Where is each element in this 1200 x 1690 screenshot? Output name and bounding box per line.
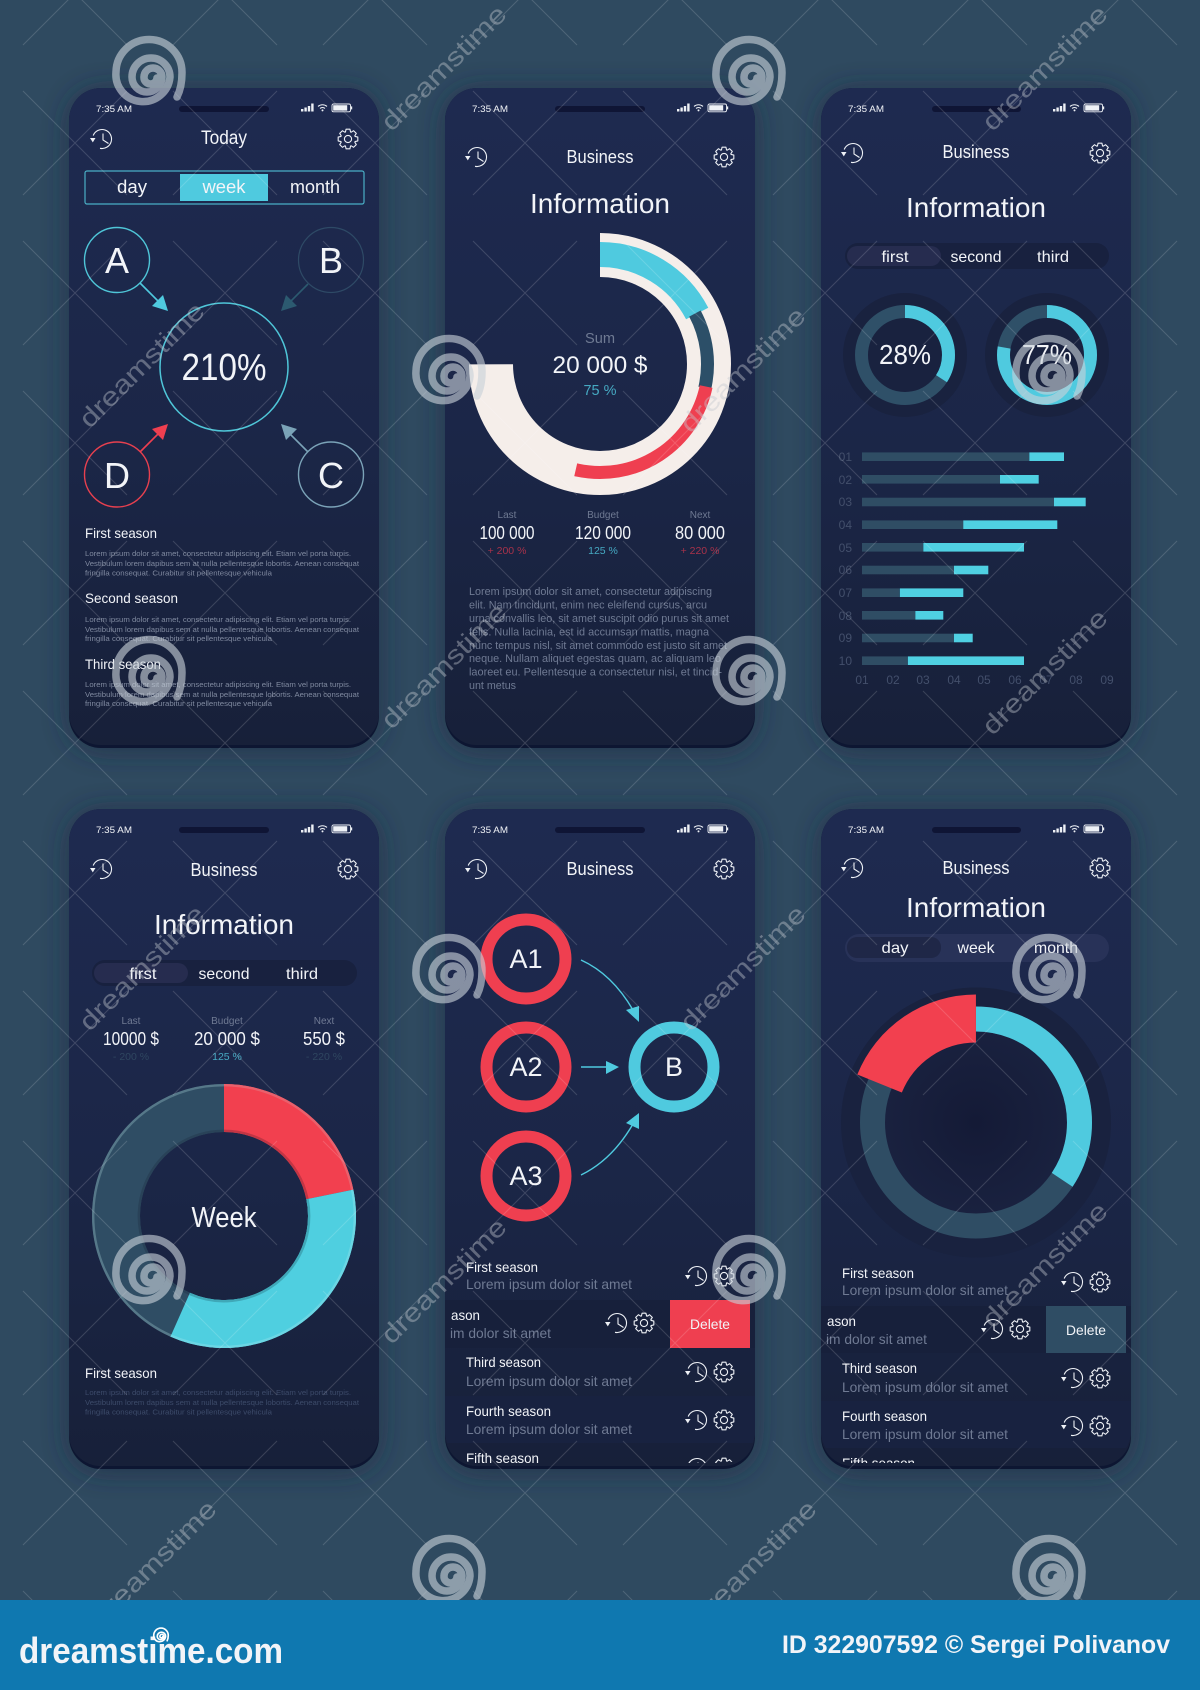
footer band bbox=[0, 1600, 1200, 1690]
list row: fourth season: Fourth season bbox=[466, 1403, 551, 1419]
title: information: Information bbox=[906, 892, 1046, 923]
delete button bbox=[1046, 1306, 1126, 1353]
list row: swiped second season: ason bbox=[451, 1307, 480, 1323]
watermark spirals bbox=[116, 40, 1082, 1601]
title: information: Information bbox=[154, 909, 294, 940]
node B bbox=[298, 228, 364, 292]
status bar: 7:35 AM bbox=[848, 825, 884, 836]
text block: first season: First season bbox=[85, 1365, 157, 1381]
status bar bbox=[96, 104, 352, 115]
gauge 77% bbox=[985, 293, 1109, 417]
tab control: third bbox=[1037, 249, 1069, 266]
watermark wordmarks: dreamstime bbox=[976, 1196, 1114, 1334]
list row: third season: Third season bbox=[842, 1360, 917, 1376]
stat: last: - 200 % bbox=[113, 1051, 149, 1063]
arrow D bbox=[140, 424, 168, 452]
text block: second season bbox=[85, 590, 360, 643]
paragraph: felis. Nulla lacinia, est id accumsan mattis, magna bbox=[469, 626, 710, 638]
paragraph: Lorem ipsum dolor sit amet, consectetur adipiscing bbox=[469, 586, 712, 598]
status bar bbox=[472, 104, 728, 115]
node A3: A3 bbox=[509, 1161, 543, 1191]
bar chart: 01 bbox=[839, 450, 852, 464]
paragraph: unt metus bbox=[469, 680, 516, 692]
text block: third season bbox=[85, 656, 360, 708]
bar chart: 04 bbox=[839, 518, 852, 532]
bar chart bbox=[839, 450, 1114, 687]
sum readout: Sum bbox=[585, 330, 615, 347]
icon: settings bbox=[1090, 858, 1110, 878]
list row: first season bbox=[842, 1265, 1110, 1298]
watermark wordmarks: dreamstime bbox=[85, 1494, 223, 1632]
paragraph: nunc tempus nisl, sit amet commodo est justo sit amet bbox=[469, 640, 727, 652]
list row: fifth season bbox=[467, 1453, 732, 1463]
text block: third season: Lorem ipsum dolor sit amet, consectetur adipiscing elit. Etiam vel porta turpis. bbox=[85, 680, 351, 689]
arrow A3 to B bbox=[581, 1113, 639, 1175]
node A: A bbox=[105, 240, 129, 281]
segmented control: week bbox=[201, 177, 247, 197]
heading: business: Business bbox=[190, 860, 258, 880]
bar chart: 07 bbox=[1039, 673, 1053, 687]
list row: swiped second season: im dolor sit amet bbox=[826, 1331, 927, 1347]
text block: first season: Lorem ipsum dolor sit amet, consectetur adipiscing elit. Etiam vel porta turpis. bbox=[85, 1388, 351, 1397]
text block: second season: Second season bbox=[85, 590, 178, 606]
arrow A1 to B bbox=[581, 960, 639, 1022]
stat: next: 550 $ bbox=[303, 1029, 345, 1049]
icon: history bbox=[841, 859, 863, 878]
centre circle 210%: 210% bbox=[182, 347, 266, 389]
stat: budget: Budget bbox=[587, 510, 619, 521]
list row: first season: First season bbox=[466, 1259, 538, 1275]
text block: first season: Vestibulum lorem dapibus sem at nulla pellentesque lobortis. Aenean consequat bbox=[85, 1398, 360, 1407]
stat: budget bbox=[194, 1016, 260, 1063]
tab control: second bbox=[198, 966, 250, 983]
paragraph: neque. Nullam aliquet egestas quam, ac aliquam leo bbox=[469, 653, 721, 665]
gauge 28% bbox=[843, 293, 967, 417]
sum readout bbox=[552, 330, 648, 399]
icon: settings bbox=[714, 859, 734, 879]
stat: budget: 20 000 $ bbox=[194, 1029, 260, 1049]
list row: first season: Lorem ipsum dolor sit amet bbox=[842, 1282, 1008, 1298]
donut label: Week bbox=[192, 1202, 257, 1234]
stat: next: - 220 % bbox=[306, 1051, 342, 1063]
title: information: Information bbox=[906, 192, 1046, 223]
centre circle 210% bbox=[160, 303, 288, 431]
segmented control: month bbox=[290, 177, 340, 197]
status bar bbox=[96, 824, 352, 836]
icon: settings bbox=[338, 129, 358, 149]
status bar: 7:35 AM bbox=[472, 104, 508, 115]
stat: last: + 200 % bbox=[488, 545, 526, 557]
radial chart bbox=[841, 987, 1111, 1258]
bar chart: 09 bbox=[839, 631, 852, 645]
watermark wordmarks: dreamstime bbox=[976, 603, 1114, 741]
list row: third season bbox=[466, 1354, 734, 1389]
title: information: Information bbox=[530, 188, 670, 219]
node B: B bbox=[665, 1052, 683, 1082]
bar chart: 08 bbox=[839, 609, 852, 623]
phone: week donut bbox=[51, 809, 397, 1469]
bar chart: 03 bbox=[839, 495, 852, 509]
tab control bbox=[845, 934, 1109, 962]
node A bbox=[84, 228, 150, 292]
segmented control: day bbox=[117, 177, 147, 197]
node D bbox=[84, 442, 150, 507]
watermark wordmarks: dreamstime bbox=[976, 0, 1114, 137]
stat: budget: 125 % bbox=[588, 545, 618, 557]
stat: next bbox=[675, 510, 725, 557]
watermark wordmarks: dreamstime bbox=[73, 899, 211, 1037]
delete button: Delete bbox=[1066, 1322, 1106, 1338]
list row: third season bbox=[842, 1360, 1110, 1395]
phone: radial progress and list bbox=[821, 809, 1131, 1471]
list row: third season: Lorem ipsum dolor sit amet bbox=[842, 1379, 1008, 1395]
node A2 bbox=[486, 1028, 566, 1106]
stat: last: 10000 $ bbox=[103, 1029, 159, 1049]
swipe list bbox=[821, 1265, 1131, 1471]
tab control: first bbox=[882, 249, 909, 266]
paragraph: urna convallis leo, sit amet suscipit odio purus sit amet bbox=[469, 613, 729, 625]
watermark wordmarks: dreamstime bbox=[674, 899, 812, 1037]
node D: D bbox=[104, 455, 130, 496]
bar chart: 07 bbox=[839, 586, 852, 600]
heading: business: Business bbox=[942, 858, 1010, 878]
stat: last: 100 000 bbox=[480, 523, 534, 543]
gauge 28%: 28% bbox=[879, 339, 931, 370]
node A1: A1 bbox=[509, 944, 543, 974]
paragraph bbox=[469, 586, 729, 692]
bar chart: 04 bbox=[947, 673, 961, 687]
text block: first season: First season bbox=[85, 525, 157, 541]
tab control bbox=[92, 960, 357, 986]
list row: third season: Third season bbox=[466, 1354, 541, 1370]
list row: swiped second season bbox=[826, 1318, 1030, 1344]
text block: second season: fringilla consequat. Curabitur sit pellentesque vehicula bbox=[85, 634, 273, 643]
arrow A2 to B bbox=[581, 1061, 619, 1074]
status bar bbox=[472, 824, 728, 836]
stat: next: + 220 % bbox=[681, 545, 719, 557]
list row: first season: First season bbox=[842, 1265, 914, 1281]
text block: first season bbox=[85, 525, 360, 578]
text block: second season: Vestibulum lorem dapibus sem at nulla pellentesque lobortis. Aenean consequat bbox=[85, 625, 360, 634]
paragraph: laoreet eu. Pellentesque a consectetur nisi, et tincid- bbox=[469, 667, 722, 679]
text block: third season: fringilla consequat. Curabitur sit pellentesque vehicula bbox=[85, 699, 273, 708]
arrow C bbox=[281, 424, 308, 452]
stat: last bbox=[480, 510, 534, 557]
text block: third season: Third season bbox=[85, 656, 161, 672]
phone: flow diagram and list bbox=[445, 809, 755, 1478]
icon: settings bbox=[1090, 143, 1110, 163]
heading: business: Business bbox=[566, 859, 634, 879]
tab control: day bbox=[882, 940, 908, 957]
text block: second season: Lorem ipsum dolor sit amet, consectetur adipiscing elit. Etiam vel porta turpis. bbox=[85, 615, 351, 624]
bar chart: 02 bbox=[839, 473, 852, 487]
tab control: week bbox=[957, 940, 995, 957]
icon: settings bbox=[338, 859, 358, 879]
bar chart: 09 bbox=[1100, 673, 1114, 687]
node A3 bbox=[486, 1136, 566, 1216]
tab control: first bbox=[130, 966, 157, 983]
icon: history bbox=[465, 148, 487, 167]
status bar: 7:35 AM bbox=[472, 825, 508, 836]
stat: budget: Budget bbox=[211, 1016, 243, 1027]
list row: fourth season bbox=[466, 1403, 734, 1437]
node C: C bbox=[318, 455, 344, 496]
stat: next: 80 000 bbox=[675, 523, 725, 543]
list row: fourth season: Fourth season bbox=[842, 1408, 927, 1424]
stat: last: Last bbox=[122, 1016, 141, 1027]
bar chart: 10 bbox=[839, 654, 852, 668]
bar chart: 05 bbox=[839, 541, 852, 555]
icon: history bbox=[841, 144, 863, 163]
phone: business arc gauge bbox=[445, 88, 755, 748]
node B: B bbox=[319, 240, 343, 281]
stat: budget: 120 000 bbox=[575, 523, 631, 543]
phone: gauges and bars bbox=[821, 88, 1131, 748]
list row: fifth season: Fifth season bbox=[466, 1450, 539, 1466]
list row: first season: Lorem ipsum dolor sit amet bbox=[466, 1276, 632, 1292]
segmented control bbox=[85, 171, 364, 204]
bar chart: 08 bbox=[1069, 673, 1083, 687]
watermark wordmarks: dreamstime bbox=[375, 1212, 513, 1350]
footer logo: dreamstime.com bbox=[19, 1630, 283, 1671]
status bar: 7:35 AM bbox=[848, 104, 884, 115]
list row: fourth season bbox=[842, 1408, 1110, 1442]
stat: budget: 125 % bbox=[212, 1051, 242, 1063]
text block: first season: Vestibulum lorem dapibus sem at nulla pellentesque lobortis. Aenean consequat bbox=[85, 559, 360, 568]
paragraph: elit. Nam tincidunt, enim nec eleifend cursus, arcu bbox=[469, 600, 707, 612]
watermark wordmarks: dreamstime bbox=[674, 301, 812, 439]
watermark wordmarks: dreamstime bbox=[375, 597, 513, 735]
list row: fourth season: Lorem ipsum dolor sit amet bbox=[842, 1426, 1008, 1442]
tab control: third bbox=[286, 966, 318, 983]
donut chart: week bbox=[51, 1043, 397, 1389]
gauge 77%: 77% bbox=[1022, 339, 1072, 370]
status bar: 7:35 AM bbox=[96, 104, 132, 115]
bar chart: 03 bbox=[916, 673, 930, 687]
footer credit: ID 322907592 © Sergei Polivanov bbox=[782, 1631, 1170, 1659]
heading: business: Business bbox=[942, 142, 1010, 162]
list row: swiped second season: im dolor sit amet bbox=[450, 1325, 551, 1341]
text block: third season: Vestibulum lorem dapibus sem at nulla pellentesque lobortis. Aenean consequat bbox=[85, 690, 360, 699]
text block: first season: fringilla consequat. Curabitur sit pellentesque vehicula bbox=[85, 568, 273, 578]
status bar bbox=[848, 104, 1104, 115]
icon: history bbox=[465, 860, 487, 879]
delete button bbox=[670, 1300, 750, 1348]
node A1 bbox=[486, 920, 566, 998]
watermark wordmarks: dreamstime bbox=[685, 1494, 823, 1632]
icon: history bbox=[90, 860, 112, 879]
tab control: month bbox=[1034, 940, 1078, 957]
tab control bbox=[845, 243, 1109, 269]
node C bbox=[298, 442, 364, 507]
bar chart: 06 bbox=[1008, 673, 1022, 687]
list row: swiped second season bbox=[450, 1312, 654, 1338]
stat: next: Next bbox=[314, 1016, 335, 1027]
node A2: A2 bbox=[509, 1052, 543, 1082]
status bar bbox=[848, 824, 1104, 836]
bar chart: 05 bbox=[977, 673, 991, 687]
watermark wordmarks: dreamstime bbox=[375, 0, 513, 137]
stat: budget bbox=[575, 510, 631, 557]
list row: third season: Lorem ipsum dolor sit amet bbox=[466, 1373, 632, 1389]
stat: next: Next bbox=[690, 510, 711, 521]
icon: settings bbox=[714, 147, 734, 167]
sum readout: 75 % bbox=[584, 382, 616, 399]
stat: last bbox=[103, 1016, 159, 1063]
list row: fifth season: Fifth season bbox=[842, 1455, 915, 1471]
list row: swiped second season: ason bbox=[827, 1313, 856, 1329]
status bar: 7:35 AM bbox=[96, 825, 132, 836]
icon: history bbox=[90, 130, 112, 149]
phone: today connections bbox=[69, 88, 379, 748]
watermark wordmarks: dreamstime bbox=[73, 296, 211, 434]
list row: fourth season: Lorem ipsum dolor sit amet bbox=[466, 1421, 632, 1437]
text block: first season bbox=[85, 1365, 360, 1416]
arrow A bbox=[140, 283, 168, 311]
stat: last: Last bbox=[498, 510, 517, 521]
text block: first season: fringilla consequat. Curabitur sit pellentesque vehicula bbox=[85, 1408, 273, 1416]
tab control: second bbox=[950, 249, 1002, 266]
bar chart: 01 bbox=[855, 673, 869, 687]
arrow B bbox=[281, 284, 308, 311]
bar chart: 02 bbox=[886, 673, 900, 687]
text block: first season: Lorem ipsum dolor sit amet, consectetur adipiscing elit. Etiam vel porta turpis. bbox=[85, 549, 351, 558]
sum readout: 20 000 $ bbox=[552, 352, 648, 379]
swipe list bbox=[450, 1262, 750, 1463]
node B bbox=[634, 1028, 714, 1106]
heading: business: Business bbox=[566, 147, 634, 167]
multi-layer arc chart bbox=[455, 219, 745, 509]
delete button: Delete bbox=[690, 1316, 730, 1332]
bar chart: 06 bbox=[839, 563, 852, 577]
stat: next bbox=[303, 1016, 345, 1063]
list row: first season bbox=[466, 1259, 734, 1292]
heading: today: Today bbox=[201, 128, 247, 149]
